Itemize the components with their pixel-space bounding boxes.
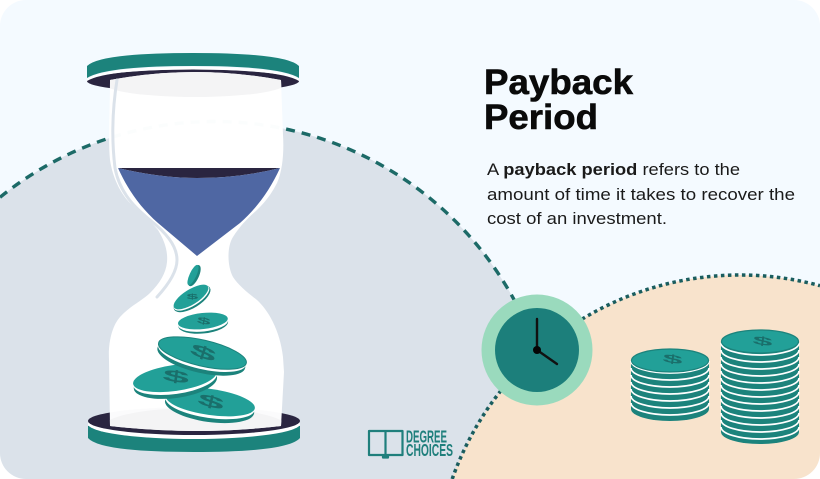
icon: open book (369, 431, 402, 458)
icon: large coin stack (721, 330, 799, 444)
description text: amount of time it takes to recover the (487, 185, 795, 204)
hourglass bottom cap (88, 407, 300, 452)
logo (369, 426, 453, 460)
icon: small coin stack (631, 349, 709, 421)
description text: cost of an investment. (487, 209, 667, 228)
icon: large coin stack: $ (752, 333, 774, 349)
hourglass top cap (87, 53, 299, 92)
title: Payback (484, 63, 634, 102)
coin 4: $ (187, 339, 219, 366)
hourglass (87, 53, 300, 452)
glass highlight (113, 80, 177, 297)
coin 5 (131, 359, 219, 404)
title: Period (484, 98, 598, 137)
coin 6 (163, 383, 257, 428)
description text (487, 160, 795, 228)
coin 3 (177, 310, 229, 336)
blue sand (118, 168, 280, 256)
coin 4 (154, 330, 249, 383)
icon: clock (482, 294, 592, 406)
falling coins (131, 263, 257, 428)
coin 2 (169, 280, 215, 317)
icon: small coin stack: $ (662, 351, 684, 367)
coin 3: $ (196, 315, 212, 327)
logo wordmark: CHOICES (406, 440, 453, 460)
logo wordmark: DEGREE (406, 426, 447, 446)
panel: gray semicircle with dashed edge (0, 121, 555, 479)
dark sand surface (118, 168, 280, 178)
panel: peach semicircle with dotted edge (452, 275, 820, 479)
coin 5: $ (162, 366, 191, 387)
coin 1 (185, 263, 203, 288)
hourglass glass body (108, 72, 284, 431)
coin 6: $ (196, 390, 226, 414)
description text: A payback period refers to the (487, 160, 740, 179)
coin 2: $ (187, 293, 199, 301)
